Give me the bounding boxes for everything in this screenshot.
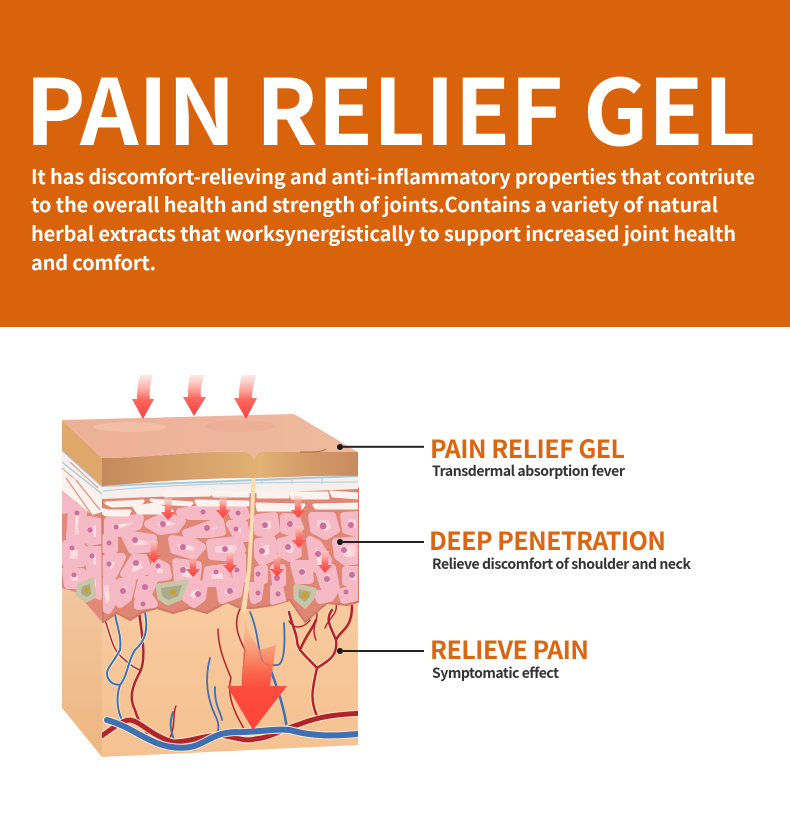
white strata layer [62, 450, 358, 515]
arrow 3 [234, 375, 257, 419]
intro paragraph: It has discomfort-relieving and anti-inflammatory properties that contriute [31, 161, 755, 190]
header band [0, 0, 790, 327]
intro paragraph: herbal extracts that worksynergistically to support increased joint health [31, 218, 736, 247]
callout: pain relief gel [337, 430, 626, 481]
intro paragraph [31, 161, 755, 276]
epidermis cell layer: front face [99, 488, 360, 622]
epidermis cell layer: left face [62, 470, 102, 622]
skin cross-section diagram [62, 375, 365, 757]
small penetration arrows [147, 496, 332, 577]
callout: deep penetration: Relieve discomfort of shoulder and neck [432, 554, 692, 574]
callout: pain relief gel: PAIN RELIEF GEL [430, 430, 625, 466]
callout: deep penetration [337, 522, 692, 574]
callout: relieve pain: RELIEVE PAIN [430, 631, 589, 667]
arrow 1 [132, 375, 154, 419]
intro paragraph: to the overall health and strength of joints.Contains a variety of natural [31, 189, 718, 218]
callout: pain relief gel: Transdermal absorption fever [432, 461, 626, 481]
title: PAIN RELIEF GEL [25, 40, 756, 172]
surface band [62, 420, 358, 486]
damaged cells [78, 580, 314, 606]
dermis layer [62, 570, 358, 757]
callout: deep penetration: DEEP PENETRATION [429, 522, 666, 558]
crack channel [241, 462, 256, 612]
top arrows [132, 375, 257, 419]
callout: relieve pain: Symptomatic effect [432, 663, 559, 683]
blood vessels [100, 598, 365, 748]
large downward arrow [227, 612, 287, 730]
arrow 2 [183, 375, 206, 416]
skin surface [62, 414, 358, 460]
intro paragraph: and comfort. [31, 247, 156, 276]
callout: relieve pain [337, 631, 589, 683]
